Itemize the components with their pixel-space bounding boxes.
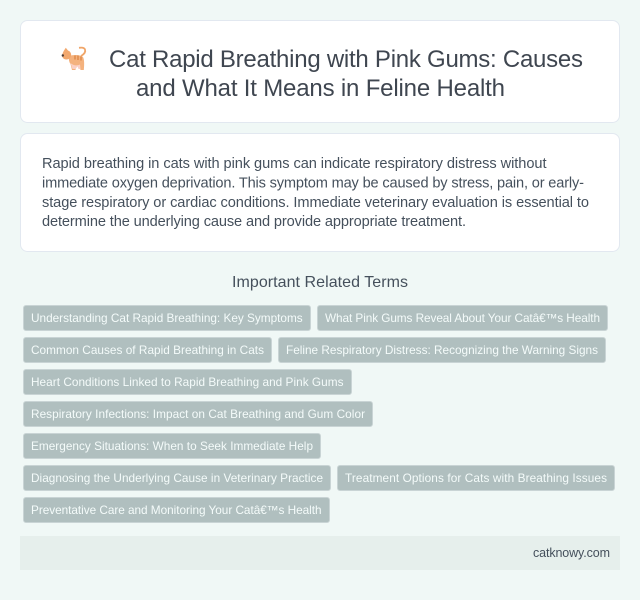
tag bbox=[24, 498, 330, 522]
footer: catknowy.com bbox=[533, 546, 610, 560]
tag: Common Causes of Rapid Breathing in Cats bbox=[31, 343, 264, 357]
tag bbox=[338, 466, 614, 490]
tag bbox=[24, 402, 372, 426]
tag: Emergency Situations: When to Seek Immediate Help bbox=[31, 439, 313, 453]
tag: Treatment Options for Cats with Breathing Issues bbox=[345, 471, 607, 485]
tag: Feline Respiratory Distress: Recognizing the Warning Signs bbox=[286, 343, 598, 357]
tag bbox=[24, 466, 330, 490]
tag: Respiratory Infections: Impact on Cat Breathing and Gum Color bbox=[31, 407, 365, 421]
tag: Diagnosing the Underlying Cause in Veterinary Practice bbox=[31, 471, 323, 485]
panel: summary paragraph bbox=[20, 134, 620, 252]
panel: summary paragraph: stage respiratory or cardiac conditions. Immediate veterinary evaluation is essential to bbox=[42, 195, 589, 211]
tag bbox=[318, 306, 608, 330]
title bbox=[109, 46, 583, 102]
tag: What Pink Gums Reveal About Your Catâ€™s Health bbox=[325, 311, 600, 325]
tag bbox=[24, 434, 320, 458]
title: Cat Rapid Breathing with Pink Gums: Causes bbox=[109, 46, 583, 73]
tag: Understanding Cat Rapid Breathing: Key Symptoms bbox=[31, 311, 303, 325]
tag list bbox=[24, 306, 614, 522]
panel: title card bbox=[20, 20, 620, 122]
tag bbox=[24, 338, 272, 362]
panel: summary paragraph: Rapid breathing in cats with pink gums can indicate respiratory distress without bbox=[42, 156, 546, 172]
footer bbox=[20, 536, 620, 570]
panel: summary paragraph: immediate oxygen deprivation. This symptom may be caused by stress, pain, or early- bbox=[42, 176, 584, 192]
icon: orange cat bbox=[62, 48, 85, 70]
panel: summary paragraph: determine the underlying cause and provide appropriate treatment. bbox=[42, 214, 466, 230]
heading: related terms: Important Related Terms bbox=[232, 274, 408, 291]
tag: Preventative Care and Monitoring Your Catâ€™s Health bbox=[31, 503, 322, 517]
title: and What It Means in Feline Health bbox=[136, 75, 505, 102]
tag bbox=[278, 338, 606, 362]
tag bbox=[24, 306, 310, 330]
tag: Heart Conditions Linked to Rapid Breathing and Pink Gums bbox=[31, 375, 344, 389]
tag bbox=[24, 370, 352, 394]
